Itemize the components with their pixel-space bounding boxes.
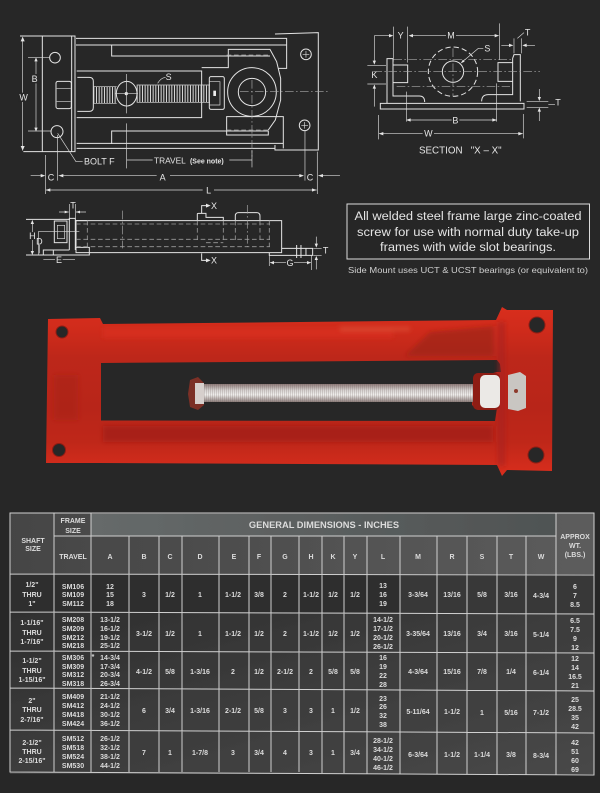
row: shaft 1/2 to 1 inch: 13 [379, 583, 387, 590]
dimension W and B [18, 37, 52, 151]
row: shaft 2 to 2-7/16 inch: 2-1/2 [225, 708, 241, 715]
row: shaft 1-1/2 to 1-15/16 inch: 21 [571, 683, 579, 690]
row: shaft 1-1/16 to 1-7/16 inch: 19-1/2 [100, 635, 120, 642]
row: shaft 1/2 to 1 inch: 18 [106, 601, 114, 608]
row: shaft 2-1/2 to 2-15/16 inch [18, 736, 579, 774]
row: shaft 1-1/2 to 1-15/16 inch: 16.5 [568, 674, 582, 681]
row: shaft 1-1/16 to 1-7/16 inch: 20-1/2 [373, 635, 393, 642]
row: shaft 2-1/2 to 2-15/16 inch: 1-1/4 [474, 752, 490, 759]
description callout box [347, 204, 590, 259]
dimension W and B: B [32, 74, 38, 84]
row: shaft 1/2 to 1 inch: SM106 [62, 584, 84, 591]
top view drawing [18, 33, 340, 195]
row: shaft 1/2 to 1 inch: 1/2" [25, 582, 39, 589]
row: shaft 1-1/16 to 1-7/16 inch: 13/16 [443, 631, 461, 638]
header labels: A [107, 554, 113, 561]
header labels: E [232, 554, 237, 561]
row: shaft 2-1/2 to 2-15/16 inch: 1 [168, 750, 172, 757]
header labels: SIZE [65, 528, 81, 535]
row: shaft 2-1/2 to 2-15/16 inch: 3/4 [254, 750, 264, 757]
row: shaft 1/2 to 1 inch: 1-1/2 [225, 592, 241, 599]
row: shaft 2 to 2-7/16 inch: 23 [379, 696, 387, 703]
row: shaft 2 to 2-7/16 inch: 25 [571, 697, 579, 704]
header labels: D [197, 554, 203, 561]
row: shaft 1/2 to 1 inch: 1-1/2 [303, 592, 319, 599]
dimensions Y M K T: Y [398, 31, 404, 41]
row: shaft 2 to 2-7/16 inch: THRU [22, 707, 42, 714]
row: shaft 2-1/2 to 2-15/16 inch: 3 [231, 750, 235, 757]
header labels: R [449, 554, 455, 561]
row: shaft 2 to 2-7/16 inch: SM412 [62, 703, 84, 710]
row: shaft 2-1/2 to 2-15/16 inch: 28-1/2 [373, 738, 393, 745]
row: shaft 2-1/2 to 2-15/16 inch: 46-1/2 [373, 765, 393, 772]
row: shaft 1/2 to 1 inch: 3/8 [254, 592, 264, 599]
row: shaft 1/2 to 1 inch: 3/16 [504, 592, 518, 599]
bolt F callout: BOLT F [84, 156, 115, 166]
row: shaft 1-1/2 to 1-15/16 inch: 28 [379, 682, 387, 689]
travel dimension: (See note) [190, 158, 224, 165]
mounting holes [52, 317, 545, 463]
row: shaft 1-1/2 to 1-15/16 inch: THRU [22, 668, 42, 675]
row: shaft 1-1/16 to 1-7/16 inch: 1-1/2 [303, 631, 319, 638]
row: shaft 2-1/2 to 2-15/16 inch: 1-7/8 [192, 750, 208, 757]
travel dimension: TRAVEL [154, 155, 186, 165]
row: shaft 1-1/16 to 1-7/16 inch: 9 [573, 636, 577, 643]
row: shaft 1-1/16 to 1-7/16 inch: 3-1/2 [136, 631, 152, 638]
row: shaft 2 to 2-7/16 inch: 35 [571, 715, 579, 722]
row: shaft 1/2 to 1 inch: 4-3/4 [533, 593, 549, 600]
end profile [26, 218, 89, 255]
header labels: GENERAL DIMENSIONS - INCHES [249, 520, 399, 530]
row: shaft 1-1/16 to 1-7/16 inch: 7.5 [570, 627, 580, 634]
header labels: B [141, 554, 147, 561]
row: shaft 1-1/2 to 1-15/16 inch: 1-3/16 [190, 669, 210, 676]
header labels: F [257, 554, 262, 561]
header labels: WT. [569, 543, 581, 550]
row: shaft 1-1/2 to 1-15/16 inch: SM318 [62, 681, 84, 688]
dimensions G T [269, 237, 329, 270]
row: shaft 1-1/2 to 1-15/16 inch: 22 [379, 673, 387, 680]
row: shaft 2-1/2 to 2-15/16 inch: 2-1/2" [22, 740, 42, 747]
header labels: S [480, 554, 485, 561]
dimensions B W T: W [424, 129, 433, 139]
dimensions B W T: B [452, 115, 458, 125]
row: shaft 1-1/2 to 1-15/16 inch: 19 [379, 664, 387, 671]
product photo: red frame [46, 307, 553, 476]
row: shaft 2 to 2-7/16 inch: 1/2 [350, 708, 360, 715]
dimensions Y M K T: T [525, 28, 531, 38]
travel dimension [127, 123, 252, 168]
row: shaft 2 to 2-7/16 inch: 7-1/2 [533, 710, 549, 717]
row: shaft 1-1/16 to 1-7/16 inch: 16-1/2 [100, 626, 120, 633]
row: shaft 1-1/16 to 1-7/16 inch: 1-1/2 [225, 631, 241, 638]
side view drawing [26, 201, 329, 270]
row: shaft 1-1/2 to 1-15/16 inch: 26-3/4 [100, 681, 120, 688]
row: shaft 1-1/2 to 1-15/16 inch: 4-3/64 [408, 669, 428, 676]
row: shaft 2-1/2 to 2-15/16 inch: 32-1/2 [100, 745, 120, 752]
row: shaft 1-1/2 to 1-15/16 inch: 1-15/16" [18, 677, 46, 684]
row: shaft 1-1/16 to 1-7/16 inch: SM218 [62, 643, 84, 650]
row: shaft 1/2 to 1 inch: 1/2 [165, 592, 175, 599]
row: shaft 2-1/2 to 2-15/16 inch: 4 [283, 750, 287, 757]
row: shaft 1-1/2 to 1-15/16 inch: 5/8 [328, 669, 338, 676]
row: shaft 2-1/2 to 2-15/16 inch: 1-1/2 [444, 752, 460, 759]
row: shaft 1-1/16 to 1-7/16 inch: 1/2 [328, 631, 338, 638]
row: shaft 1-1/2 to 1-15/16 inch: 2 [309, 669, 313, 676]
row: shaft 2-1/2 to 2-15/16 inch: 8-3/4 [533, 753, 549, 760]
row: shaft 1-1/16 to 1-7/16 inch: SM212 [62, 635, 84, 642]
threaded screw S: S [166, 72, 172, 82]
row: shaft 1-1/16 to 1-7/16 inch: 3-35/64 [406, 631, 430, 638]
dimensions Y M K T: K [371, 70, 377, 80]
dimensions B W T [379, 83, 561, 139]
dimensions C A C L: A [160, 172, 166, 182]
row: shaft 1-1/16 to 1-7/16 inch: 25-1/2 [100, 643, 120, 650]
header labels: C [167, 554, 173, 561]
bearing note: Side Mount uses UCT & UCST bearings (or equivalent to) [348, 265, 588, 275]
row: shaft 1-1/2 to 1-15/16 inch: 14-3/4 [100, 655, 120, 662]
row: shaft 2-1/2 to 2-15/16 inch: 7 [142, 750, 146, 757]
dimensions T H D E: E [56, 255, 62, 265]
description callout box: All welded steel frame large zinc-coated [354, 209, 582, 223]
row: shaft 2 to 2-7/16 inch: 38 [379, 722, 387, 729]
row: shaft 2 to 2-7/16 inch: 32 [379, 713, 387, 720]
section X-X drawing [367, 23, 561, 156]
description callout box: frames with wide slot bearings. [380, 240, 556, 254]
row: shaft 2 to 2-7/16 inch: 6 [142, 708, 146, 715]
row: shaft 1/2 to 1 inch: 3-3/64 [408, 592, 428, 599]
row: shaft 2-1/2 to 2-15/16 inch: 3/4 [350, 750, 360, 757]
row: shaft 1/2 to 1 inch: 15 [106, 592, 114, 599]
row: shaft 2 to 2-7/16 inch: 2-7/16" [20, 717, 44, 724]
frame body [76, 205, 282, 253]
row: shaft 2 to 2-7/16 inch: 5/16 [504, 710, 518, 717]
header labels: H [308, 554, 314, 561]
row: shaft 2 to 2-7/16 inch: 30-1/2 [100, 712, 120, 719]
bearing bore circles [373, 44, 540, 97]
dimensions Y M K T: M [447, 30, 455, 40]
row: shaft 2-1/2 to 2-15/16 inch: 60 [571, 758, 579, 765]
row: shaft 1/2 to 1 inch: 1" [28, 601, 36, 608]
header labels: Y [353, 554, 358, 561]
bearing circles [228, 68, 330, 157]
row: shaft 1-1/16 to 1-7/16 inch: 17-1/2 [373, 626, 393, 633]
row: shaft 2 to 2-7/16 inch: 5/8 [254, 708, 264, 715]
threaded screw [200, 384, 473, 402]
dimensions C A C L: C [48, 172, 55, 182]
row: shaft 1-1/16 to 1-7/16 inch: 14-1/2 [373, 617, 393, 624]
row: shaft 1-1/16 to 1-7/16 inch: 1/2 [350, 631, 360, 638]
header labels: W [538, 554, 545, 561]
header labels [21, 518, 590, 561]
dimensions G T: G [286, 258, 293, 268]
bearing bore circles: S [484, 44, 490, 54]
row: shaft 2 to 2-7/16 inch: 21-1/2 [100, 694, 120, 701]
row: shaft 1-1/2 to 1-15/16 inch: 15/16 [443, 669, 461, 676]
row: shaft 1-1/2 to 1-15/16 inch: 12 [571, 656, 579, 663]
header labels: SIZE [25, 546, 41, 553]
table cell fills [10, 513, 594, 774]
header labels: G [282, 554, 288, 561]
row: shaft 2 to 2-7/16 inch: 1 [480, 710, 484, 717]
dimensions T H D E [29, 201, 86, 265]
row: shaft 1-1/16 to 1-7/16 inch: 1 [198, 631, 202, 638]
left mounting plate [20, 36, 75, 152]
section markers X [202, 201, 217, 266]
row: shaft 1/2 to 1 inch: 7 [573, 593, 577, 600]
row: shaft 2 to 2-7/16 inch: SM409 [62, 694, 84, 701]
screw head [188, 377, 204, 410]
row: shaft 2 to 2-7/16 inch: 3 [309, 708, 313, 715]
frame highlights and shading [54, 322, 505, 466]
row: shaft 1-1/16 to 1-7/16 inch: 2 [283, 631, 287, 638]
dimensions T H D E: H [29, 231, 36, 241]
row: shaft 2 to 2-7/16 inch: SM418 [62, 712, 84, 719]
row: shaft 1-1/16 to 1-7/16 inch: 26-1/2 [373, 644, 393, 651]
row: shaft 2 to 2-7/16 inch: 3/4 [165, 708, 175, 715]
header labels: M [415, 554, 421, 561]
header labels: (LBS.) [565, 552, 585, 559]
row: shaft 2 to 2-7/16 inch: 3 [283, 708, 287, 715]
dimensions Y M K T [367, 23, 535, 107]
section markers X: X [211, 256, 217, 266]
row: shaft 1-1/2 to 1-15/16 inch: SM306 [62, 655, 84, 662]
table grid lines [10, 513, 594, 775]
row: shaft 1-1/2 to 1-15/16 inch [18, 654, 582, 690]
row: shaft 1-1/16 to 1-7/16 inch: SM209 [62, 626, 84, 633]
row: shaft 2 to 2-7/16 inch: 26 [379, 704, 387, 711]
row: shaft 1-1/16 to 1-7/16 inch: 5-1/4 [533, 632, 549, 639]
row: shaft 1-1/2 to 1-15/16 inch: SM309 [62, 664, 84, 671]
header labels: L [381, 554, 386, 561]
row: shaft 1/2 to 1 inch: 16 [379, 592, 387, 599]
row: shaft 1-1/16 to 1-7/16 inch: SM208 [62, 617, 84, 624]
row: shaft 1-1/2 to 1-15/16 inch: 1/4 [506, 669, 516, 676]
row: shaft 1/2 to 1 inch: 12 [106, 584, 114, 591]
row: shaft 1-1/16 to 1-7/16 inch: 3/16 [504, 631, 518, 638]
row: shaft 2 to 2-7/16 inch: 1-3/16 [190, 708, 210, 715]
row: shaft 1-1/16 to 1-7/16 inch: THRU [22, 630, 42, 637]
row: shaft 1/2 to 1 inch: 5/8 [477, 592, 487, 599]
row: shaft 2 to 2-7/16 inch: 36-1/2 [100, 721, 120, 728]
header labels: FRAME [61, 518, 86, 525]
row: shaft 1-1/16 to 1-7/16 inch: 13-1/2 [100, 617, 120, 624]
row: shaft 1-1/16 to 1-7/16 inch: 3/4 [477, 631, 487, 638]
row: shaft 1-1/2 to 1-15/16 inch: 1/2 [254, 669, 264, 676]
row: shaft 1-1/2 to 1-15/16 inch: SM312 [62, 672, 84, 679]
row: shaft 1-1/16 to 1-7/16 inch: 1-1/16" [20, 620, 44, 627]
red welded frame [46, 307, 553, 476]
row: shaft 2-1/2 to 2-15/16 inch: SM530 [62, 763, 84, 770]
row: shaft 2-1/2 to 2-15/16 inch: 1 [331, 750, 335, 757]
row: shaft 2-1/2 to 2-15/16 inch: 26-1/2 [100, 736, 120, 743]
row: shaft 1/2 to 1 inch: 6 [573, 584, 577, 591]
row: shaft 2-1/2 to 2-15/16 inch: 6-3/64 [408, 752, 428, 759]
row: shaft 2 to 2-7/16 inch: 42 [571, 724, 579, 731]
row: shaft 1-1/16 to 1-7/16 inch: 1/2 [165, 631, 175, 638]
row: shaft 1/2 to 1 inch: 13/16 [443, 592, 461, 599]
bolt F callout [58, 133, 115, 166]
row: shaft 1-1/2 to 1-15/16 inch: 17-3/4 [100, 664, 120, 671]
row: shaft 1-1/16 to 1-7/16 inch: 12 [571, 645, 579, 652]
row: shaft 2-1/2 to 2-15/16 inch: 2-15/16" [18, 758, 46, 765]
row: shaft 2 to 2-7/16 inch: SM424 [62, 721, 84, 728]
row: shaft 1-1/2 to 1-15/16 inch: 5/8 [165, 669, 175, 676]
row: shaft 2-1/2 to 2-15/16 inch: 3/8 [506, 752, 516, 759]
dimensions C A C L: C [307, 172, 314, 182]
section label: SECTION "X – X" [419, 145, 502, 156]
row: shaft 1-1/2 to 1-15/16 inch: 20-3/4 [100, 672, 120, 679]
row: shaft 1-1/2 to 1-15/16 inch: 7/8 [477, 669, 487, 676]
row: shaft 1-1/16 to 1-7/16 inch: 1/2 [254, 631, 264, 638]
row: shaft 1/2 to 1 inch: SM109 [62, 592, 84, 599]
header labels: T [509, 554, 514, 561]
row: shaft 2-1/2 to 2-15/16 inch: 44-1/2 [100, 763, 120, 770]
row: shaft 2 to 2-7/16 inch: 2" [28, 698, 36, 705]
row: shaft 1-1/2 to 1-15/16 inch: 4-1/2 [136, 669, 152, 676]
dimension W and B: W [19, 93, 28, 103]
row: shaft 1-1/16 to 1-7/16 inch: 6.5 [570, 618, 580, 625]
row: shaft 1/2 to 1 inch: 2 [283, 592, 287, 599]
row: shaft 1/2 to 1 inch: THRU [22, 592, 42, 599]
row: shaft 2 to 2-7/16 inch: 1 [331, 708, 335, 715]
right mounting plate [275, 33, 318, 150]
row: shaft 1-1/2 to 1-15/16 inch: 16 [379, 655, 387, 662]
row: shaft 1/2 to 1 inch: 19 [379, 601, 387, 608]
row: shaft 2-1/2 to 2-15/16 inch: 69 [571, 767, 579, 774]
dimensions B W T: T [555, 97, 561, 107]
row: shaft 2-1/2 to 2-15/16 inch: 38-1/2 [100, 754, 120, 761]
row: shaft 2 to 2-7/16 inch: 28.5 [568, 706, 582, 713]
row: shaft 1/2 to 1 inch: 1 [198, 592, 202, 599]
dimensions C A C L: L [206, 185, 211, 195]
section markers X: X [211, 201, 217, 211]
row: shaft 1-1/16 to 1-7/16 inch: 1-7/16" [20, 639, 44, 646]
row: shaft 2-1/2 to 2-15/16 inch: SM512 [62, 736, 84, 743]
row: shaft 2-1/2 to 2-15/16 inch: SM518 [62, 745, 84, 752]
row: shaft 2-1/2 to 2-15/16 inch: SM524 [62, 754, 84, 761]
row: shaft 1/2 to 1 inch: 8.5 [570, 602, 580, 609]
row: shaft 2-1/2 to 2-15/16 inch: THRU [22, 749, 42, 756]
row: shaft 1-1/2 to 1-15/16 inch: 14 [571, 665, 579, 672]
header labels: SHAFT [21, 538, 45, 545]
dimensions C A C L [31, 130, 340, 195]
row: shaft 2-1/2 to 2-15/16 inch: 34-1/2 [373, 747, 393, 754]
header labels: APPROX [560, 534, 590, 541]
row: shaft 1-1/2 to 1-15/16 inch: 2 [231, 669, 235, 676]
row: shaft 1/2 to 1 inch: SM112 [62, 601, 84, 608]
right tab [269, 245, 313, 258]
row: shaft 1-1/2 to 1-15/16 inch: 2-1/2 [277, 669, 293, 676]
row: shaft 1-1/2 to 1-15/16 inch: * [92, 654, 95, 661]
dimensions G T: T [323, 245, 329, 255]
row: shaft 1/2 to 1 inch: 1/2 [328, 592, 338, 599]
threaded screw S [77, 72, 224, 113]
row: shaft 1/2 to 1 inch: 1/2 [350, 592, 360, 599]
row: shaft 2 to 2-7/16 inch [20, 694, 582, 731]
dimensions T H D E: D [36, 237, 43, 247]
row: shaft 2 to 2-7/16 inch: 1-1/2 [444, 709, 460, 716]
row: shaft 2-1/2 to 2-15/16 inch: 40-1/2 [373, 756, 393, 763]
row: shaft 1/2 to 1 inch [22, 582, 580, 609]
row: shaft 1-1/2 to 1-15/16 inch: 1-1/2" [22, 658, 42, 665]
row: shaft 2-1/2 to 2-15/16 inch: 3 [309, 750, 313, 757]
row: shaft 1-1/2 to 1-15/16 inch: 6-1/4 [533, 670, 549, 677]
header labels: TRAVEL [59, 554, 87, 561]
row: shaft 2-1/2 to 2-15/16 inch: 51 [571, 749, 579, 756]
header labels: K [330, 554, 336, 561]
specification table [10, 513, 594, 775]
row: shaft 1-1/2 to 1-15/16 inch: 5/8 [350, 669, 360, 676]
row: shaft 2 to 2-7/16 inch: 5-11/64 [406, 709, 430, 716]
row: shaft 1/2 to 1 inch: 3 [142, 592, 146, 599]
row: shaft 1-1/16 to 1-7/16 inch [20, 617, 580, 652]
row: shaft 2 to 2-7/16 inch: 24-1/2 [100, 703, 120, 710]
nut and washer [473, 372, 526, 411]
angle frame profile [380, 55, 524, 109]
side rails [76, 38, 287, 148]
dimensions T H D E: T [70, 201, 76, 211]
row: shaft 2-1/2 to 2-15/16 inch: 42 [571, 740, 579, 747]
description callout box: screw for use with normal duty take-up [357, 225, 579, 239]
